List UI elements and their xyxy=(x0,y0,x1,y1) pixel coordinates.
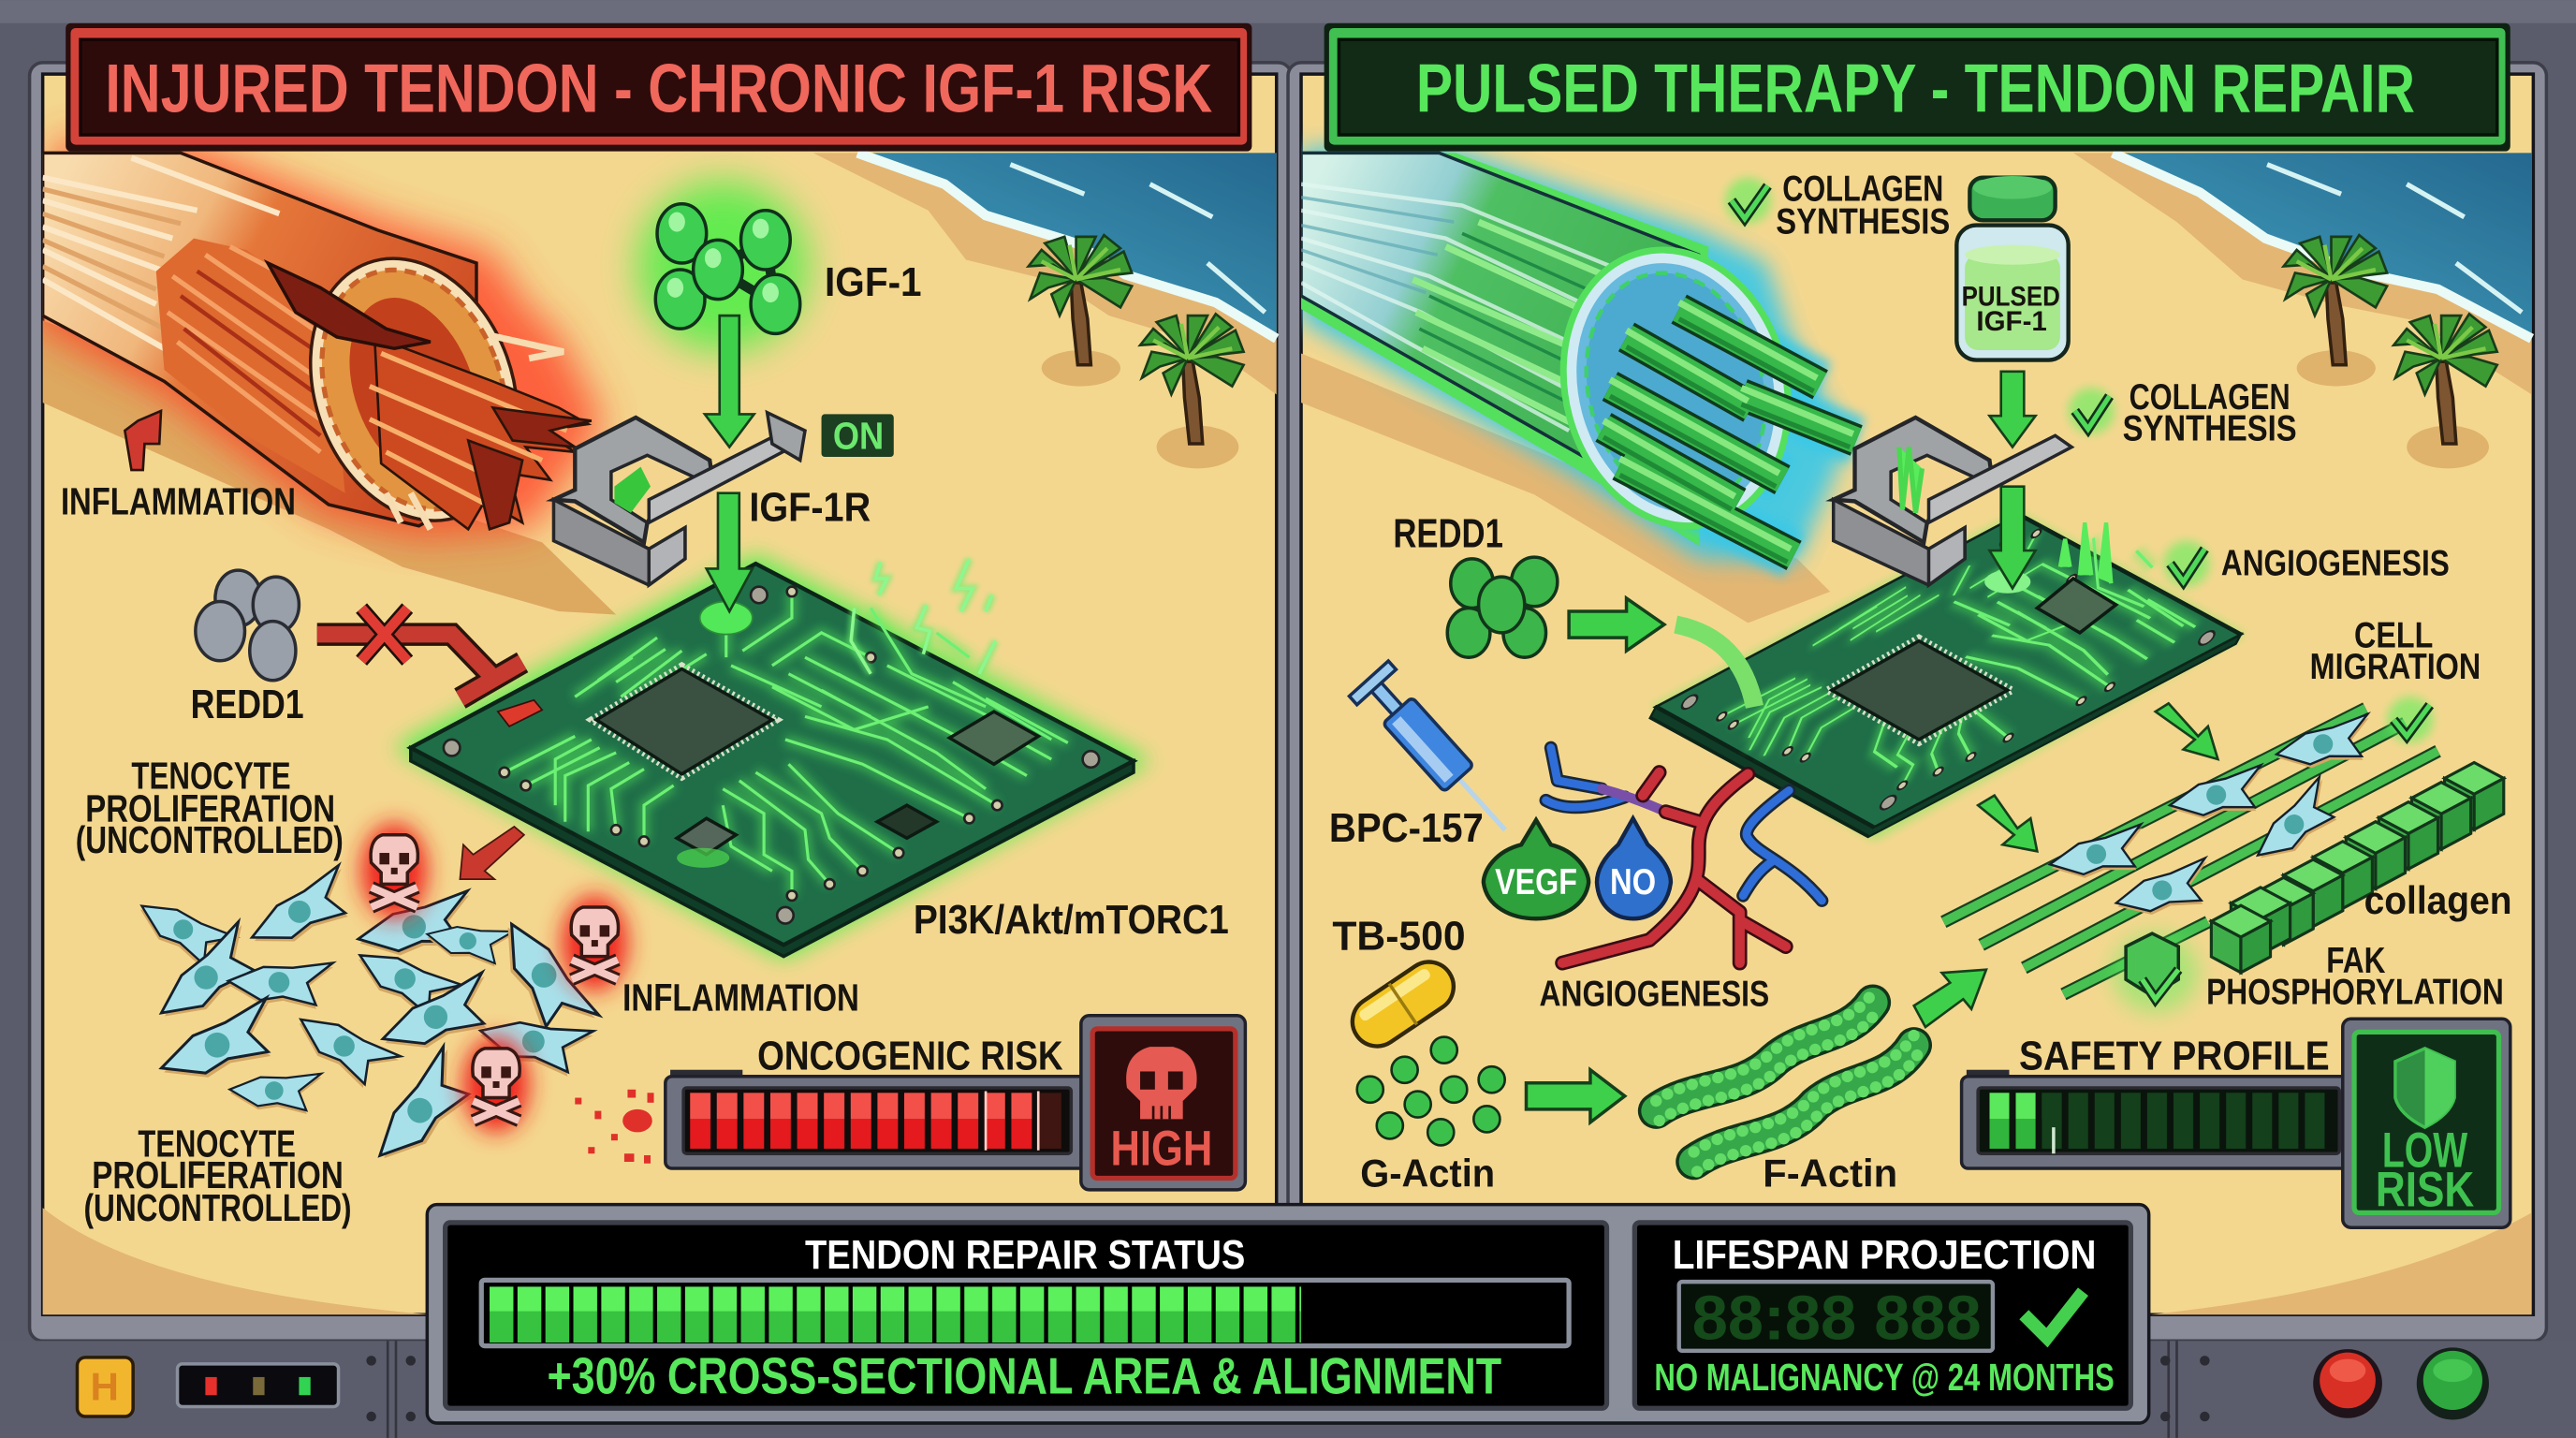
panel: injured tendon xyxy=(43,74,1277,1314)
panel: tendon repair status xyxy=(446,1223,1606,1408)
vial: pulsed IGF-1 xyxy=(1956,176,2069,360)
icon: FAK cube with check xyxy=(2113,933,2198,1012)
status console xyxy=(427,1205,2149,1423)
label: F-Actin: F-Actin xyxy=(1763,1151,1897,1195)
label: tenocyte proliferation, upper: (UNCONTROLLED) xyxy=(76,818,344,861)
badge: low risk: LOW xyxy=(2382,1123,2467,1178)
arrow: to migration xyxy=(1978,796,2037,851)
label: collagen synthesis, second: SYNTHESIS xyxy=(2123,409,2297,449)
collagen fibers xyxy=(1943,709,2438,994)
panel: tendon repair status: +30% CROSS-SECTIONAL AREA & ALIGNMENT xyxy=(547,1347,1501,1404)
icon: check xyxy=(2387,697,2433,742)
red splatter xyxy=(575,1090,654,1164)
arrow: receptor to board xyxy=(1989,487,2036,588)
label: cell migration: CELL xyxy=(2354,616,2433,656)
gauge: oncogenic risk xyxy=(666,1070,1090,1168)
label: pathway: PI3K/Akt/mTORC1 xyxy=(914,897,1229,943)
badge: high risk: HIGH xyxy=(1110,1122,1212,1177)
label: FAK phosphorylation: PHOSPHORYLATION xyxy=(2206,973,2504,1013)
badge: high risk xyxy=(1081,1016,1245,1190)
panel: lifespan projection: LIFESPAN PROJECTION xyxy=(1673,1232,2097,1278)
drop: VEGF: VEGF xyxy=(1495,862,1577,902)
arrow: vial to receptor xyxy=(1989,372,2036,448)
label: collagen: collagen xyxy=(2364,878,2512,922)
label: oncogenic risk: ONCOGENIC RISK xyxy=(757,1034,1063,1079)
injured tendon illustration xyxy=(43,153,616,615)
label: IGF-1: IGF-1 xyxy=(825,259,922,305)
icon: F-actin strands xyxy=(1656,992,1917,1172)
circuit board xyxy=(1564,471,2328,880)
gauge: safety profile xyxy=(1962,1070,2356,1168)
panel: pulsed therapy xyxy=(1301,74,2533,1314)
drop: NO: NO xyxy=(1610,862,1656,902)
label: collagen synthesis, top: SYNTHESIS xyxy=(1776,201,1950,242)
panel: tendon repair status: TENDON REPAIR STATUS xyxy=(805,1232,1245,1278)
button: H xyxy=(77,1357,133,1416)
button: red xyxy=(2313,1349,2382,1418)
drop: VEGF xyxy=(1484,820,1588,918)
panel: lifespan projection xyxy=(1634,1223,2130,1408)
title: pulsed therapy xyxy=(1325,23,2510,152)
icon: REDD1 molecule xyxy=(196,570,299,681)
label: collagen synthesis, top: COLLAGEN xyxy=(1782,169,1943,209)
icon: IGF-1 receptor switch xyxy=(553,413,805,585)
label: BPC-157: BPC-157 xyxy=(1329,805,1484,851)
title: injured tendon: INJURED TENDON - CHRONIC IGF-1 RISK xyxy=(105,49,1212,126)
label: safety profile: SAFETY PROFILE xyxy=(2019,1034,2330,1079)
title: injured tendon xyxy=(66,23,1251,152)
icon: inflammation arrow xyxy=(124,411,161,470)
label: tenocyte proliferation, upper: TENOCYTE xyxy=(131,755,291,798)
beach background xyxy=(43,74,1277,1314)
label: tenocyte proliferation, upper: PROLIFERATION xyxy=(85,787,335,830)
label: inflammation, lower: INFLAMMATION xyxy=(622,976,859,1020)
arrow: REDD1 xyxy=(1569,598,1664,651)
icon: G-actin monomers xyxy=(1357,1037,1505,1145)
badge: low risk: RISK xyxy=(2376,1162,2474,1217)
icon: check xyxy=(2069,388,2115,433)
drop: NO xyxy=(1597,818,1671,918)
label: tenocyte proliferation, lower: TENOCYTE xyxy=(138,1123,296,1166)
palm trees xyxy=(1029,235,1244,468)
button: green xyxy=(2417,1347,2489,1420)
label: angiogenesis, vessels: ANGIOGENESIS xyxy=(1540,974,1769,1014)
icon: check xyxy=(1725,178,1771,224)
tenocyte cells xyxy=(132,865,599,1170)
arrow: IGF-1 to receptor xyxy=(705,315,754,448)
palm trees xyxy=(2284,235,2497,468)
badge: low risk xyxy=(2343,1019,2510,1227)
icon: capsule xyxy=(1343,952,1463,1056)
label: cell migration: MIGRATION xyxy=(2310,647,2481,687)
status LEDs xyxy=(178,1364,339,1407)
icon: check xyxy=(2163,541,2210,587)
label: tenocyte proliferation, lower: (UNCONTROLLED) xyxy=(84,1186,352,1229)
icon: syringe xyxy=(1349,661,1525,847)
arrow: board to cells xyxy=(460,827,524,879)
arrow: receptor to board xyxy=(707,493,753,611)
label: tenocyte proliferation, lower: PROLIFERATION xyxy=(92,1153,344,1196)
label: G-Actin: G-Actin xyxy=(1360,1151,1495,1195)
healed tendon illustration xyxy=(1301,145,1856,562)
icon: active REDD1 molecule xyxy=(1447,557,1558,657)
label: FAK phosphorylation: FAK xyxy=(2326,941,2386,981)
arrow: cell migration xyxy=(2156,703,2217,759)
panel: lifespan projection: NO MALIGNANCY @ 24 MONTHS xyxy=(1654,1356,2115,1399)
label: collagen synthesis, second: COLLAGEN xyxy=(2130,377,2291,418)
inhibition arrow with X xyxy=(317,609,522,698)
panel: lifespan projection: 88:88 888 xyxy=(1692,1284,1982,1354)
label: REDD1: REDD1 xyxy=(1393,511,1503,557)
curved arrow: REDD1 to board xyxy=(1676,624,1754,707)
icon: receptor xyxy=(1834,418,2071,585)
circuit board: PI3K/Akt/mTORC1 xyxy=(411,564,1134,957)
vial: pulsed IGF-1: IGF-1 xyxy=(1976,306,2047,337)
vial: pulsed IGF-1: PULSED xyxy=(1962,282,2060,313)
arrow: F-actin to collagen xyxy=(1914,970,1986,1027)
badge: ON: ON xyxy=(833,414,884,457)
collagen blocks xyxy=(2211,763,2504,973)
label: REDD1: REDD1 xyxy=(191,682,304,727)
button: H: H xyxy=(91,1364,119,1408)
sparks xyxy=(851,559,996,674)
icon: IGF-1 molecule xyxy=(637,181,809,352)
label: IGF-1R: IGF-1R xyxy=(749,485,871,531)
beach background xyxy=(1301,74,2533,1314)
label: inflammation: INFLAMMATION xyxy=(61,479,296,522)
label: TB-500: TB-500 xyxy=(1332,914,1466,960)
arrow: G-actin to F-actin xyxy=(1526,1070,1625,1123)
blood vessels xyxy=(1546,748,1822,963)
icon: skull warnings xyxy=(361,823,627,1132)
migrating cells xyxy=(2049,714,2371,917)
label: angiogenesis: ANGIOGENESIS xyxy=(2221,543,2450,583)
